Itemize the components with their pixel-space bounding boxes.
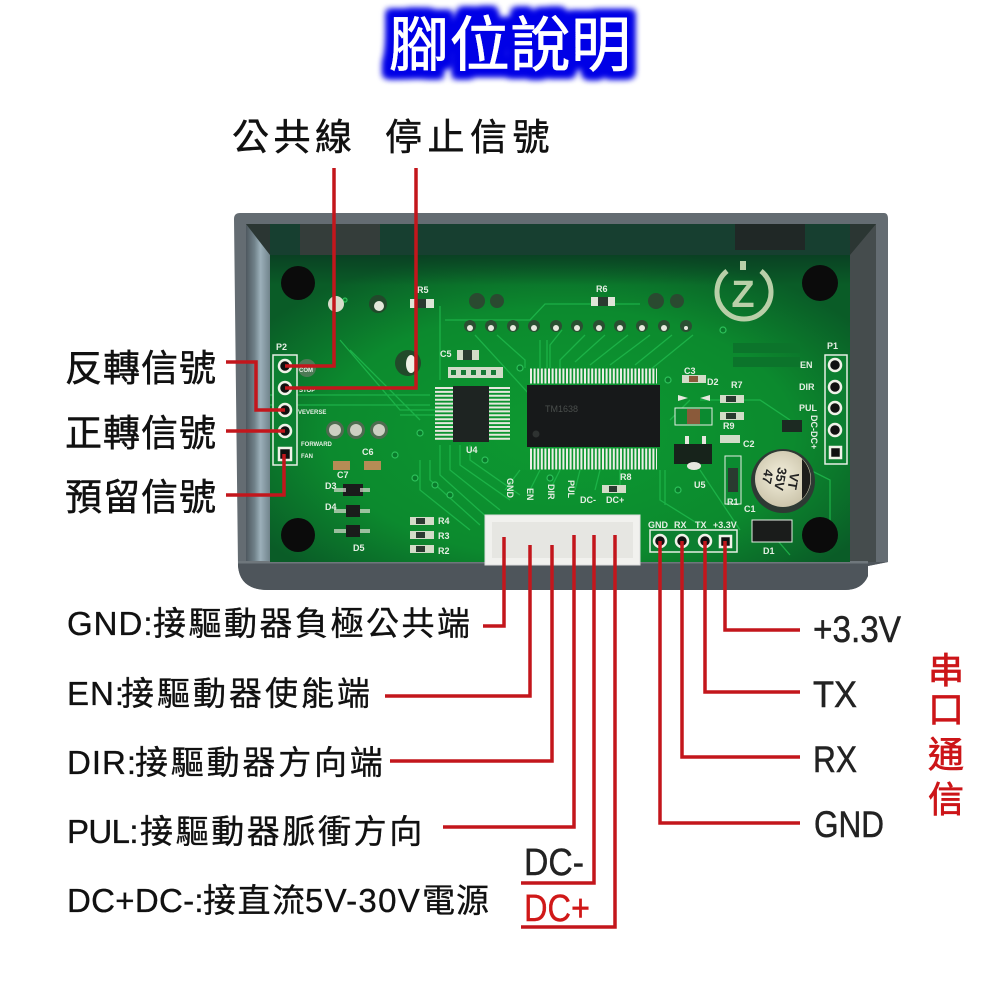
silkscreen labels: FAN xyxy=(301,454,313,460)
panel: circuit board in enclosure xyxy=(234,213,888,590)
silkscreen labels: C7 xyxy=(337,470,349,480)
label: DIR description: DIR: xyxy=(67,744,137,781)
connector xyxy=(485,515,640,565)
silkscreen labels: D5 xyxy=(353,543,365,553)
label: power description: 電源 xyxy=(422,882,490,919)
silkscreen labels: R1 xyxy=(727,497,739,507)
label: DC plus: DC+ xyxy=(524,888,590,930)
label: serial communication: 口 xyxy=(928,689,964,730)
label: reserved signal: 預留信號 xyxy=(65,477,217,518)
heading: stop signal: 停止信號 xyxy=(385,117,555,158)
silkscreen labels: FORWARD xyxy=(301,442,333,448)
silkscreen labels: R7 xyxy=(731,380,743,390)
silkscreen labels: D3 xyxy=(325,481,337,491)
chip: U4 xyxy=(444,386,499,442)
solder joints xyxy=(298,293,692,439)
label: DIR description: 接驅動器方向端 xyxy=(135,744,386,781)
icon: Z logo: Z xyxy=(731,274,755,316)
capacitor xyxy=(751,449,815,513)
label: serial communication xyxy=(928,650,964,820)
leader lines xyxy=(226,168,800,927)
label: power description: 接直流 xyxy=(203,882,306,919)
silkscreen labels: DC- xyxy=(580,495,596,505)
vias xyxy=(343,298,726,498)
silkscreen labels: GND xyxy=(505,478,515,498)
silkscreen labels: C1 xyxy=(744,504,756,514)
header P1 xyxy=(825,355,847,464)
silkscreen labels: C3 xyxy=(684,366,696,376)
silkscreen labels: TX xyxy=(695,520,707,530)
silkscreen labels: R8 xyxy=(620,472,632,482)
label: TX: TX xyxy=(813,674,857,715)
silkscreen labels: R6 xyxy=(596,284,608,294)
silkscreen labels: P1 xyxy=(827,341,838,351)
silkscreen labels: STOP xyxy=(299,388,315,394)
header serial xyxy=(650,530,737,552)
silkscreen labels: D4 xyxy=(325,502,337,512)
title: 腳位說明 xyxy=(389,12,631,79)
silkscreen labels: DIR xyxy=(546,484,556,500)
silkscreen labels: U4 xyxy=(466,445,478,455)
label: GND: GND xyxy=(814,804,884,845)
label: power description: 5V-30V xyxy=(305,882,421,919)
label: serial communication: 信 xyxy=(928,779,964,820)
label: GND description: 接驅動器負極公共端 xyxy=(153,605,472,642)
silkscreen labels: COM xyxy=(299,368,313,374)
label: serial communication: 串 xyxy=(928,650,964,691)
silkscreen labels: R5 xyxy=(417,285,429,295)
capacitor: 35V xyxy=(771,466,790,492)
silkscreen labels: DIR xyxy=(799,382,815,392)
label: DC minus: DC- xyxy=(524,842,584,884)
label: PUL description: PUL: xyxy=(67,813,138,850)
label: serial communication: 通 xyxy=(928,734,964,775)
silkscreen labels: P2 xyxy=(276,342,287,352)
chip: main controller xyxy=(527,376,660,459)
silkscreen labels: EN xyxy=(800,360,813,370)
silkscreen labels: C5 xyxy=(440,349,452,359)
silkscreen labels: GND xyxy=(648,520,668,530)
silkscreen labels: C6 xyxy=(362,447,374,457)
label: EN description: 接驅動器使能端 xyxy=(121,675,373,712)
silkscreen labels xyxy=(276,284,838,556)
silkscreen labels: R3 xyxy=(438,531,450,541)
label: forward signal: 正轉信號 xyxy=(65,413,217,454)
label: reverse signal: 反轉信號 xyxy=(65,348,217,389)
capacitor: 47 xyxy=(759,468,776,485)
silkscreen labels: PUL xyxy=(799,403,818,413)
silkscreen labels: R9 xyxy=(723,421,735,431)
silkscreen labels: D1 xyxy=(763,546,775,556)
silkscreen labels: VEVERSE xyxy=(298,410,326,416)
capacitor: VT xyxy=(784,472,802,491)
label: power description: DC+DC-: xyxy=(67,882,204,919)
silkscreen labels: EN xyxy=(525,488,535,501)
mounting holes xyxy=(281,265,838,553)
silkscreen labels: U5 xyxy=(694,480,706,490)
label: GND description: GND: xyxy=(67,605,154,642)
heading: common line: 公共線 xyxy=(232,117,356,158)
silkscreen labels: D2 xyxy=(707,377,719,387)
silkscreen labels: PUL xyxy=(566,480,576,499)
label: +3.3V: +3.3V xyxy=(813,609,901,650)
silkscreen labels: C2 xyxy=(743,439,755,449)
PCB xyxy=(270,255,850,562)
silkscreen labels: DC+ xyxy=(606,495,624,505)
silkscreen labels: +3.3V xyxy=(713,520,737,530)
header P2 xyxy=(273,355,297,465)
chip: main controller: TM1638 xyxy=(545,404,578,414)
silkscreen labels: RX xyxy=(674,520,687,530)
label: RX: RX xyxy=(813,739,857,780)
label: PUL description: 接驅動器脈衝方向 xyxy=(140,813,425,850)
label: EN description: EN: xyxy=(67,675,125,712)
silkscreen labels: R4 xyxy=(438,516,450,526)
icon: Z logo xyxy=(717,261,771,319)
silkscreen labels: R2 xyxy=(438,546,450,556)
regulator and small parts xyxy=(333,297,802,553)
silkscreen labels: DC-DC+ xyxy=(809,415,819,449)
enclosure body xyxy=(234,213,888,590)
